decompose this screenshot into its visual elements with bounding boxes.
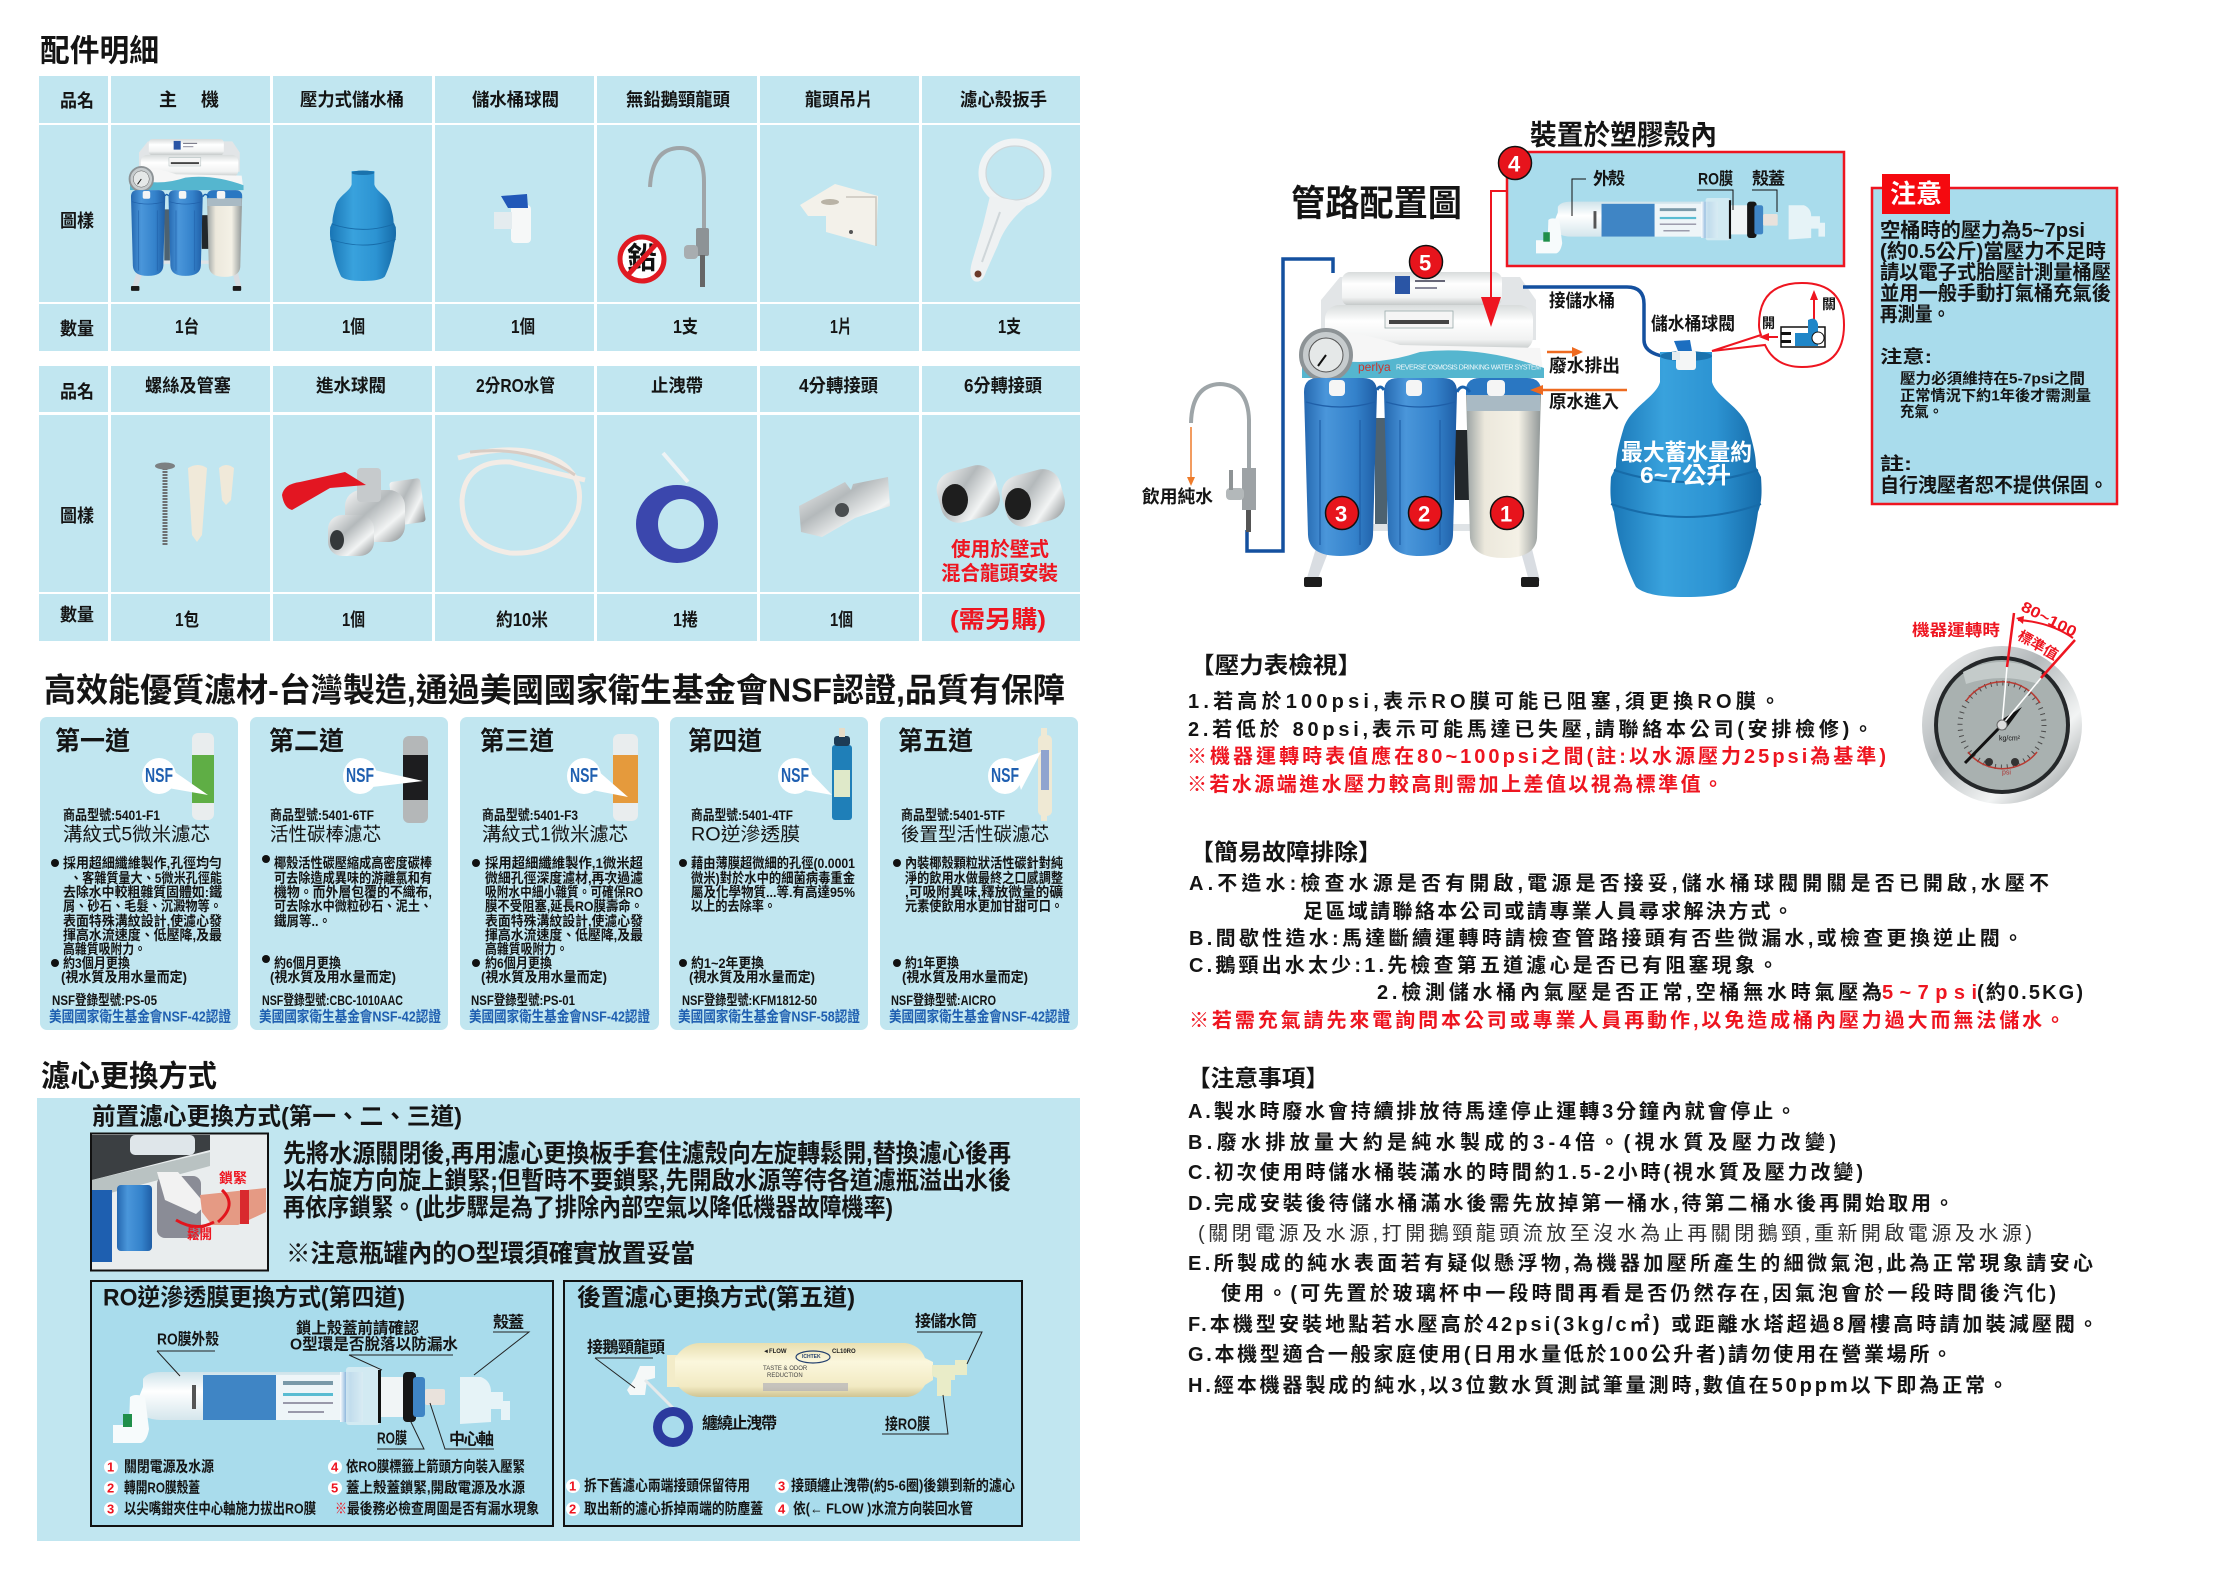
panel: filter stage 5: (視水質及用水量而定) bbox=[902, 969, 1028, 985]
heading: filter quality: 高效能優質濾材-台灣製造,通過美國國家衛生基金會NSF認證,品質有保障 bbox=[44, 672, 1065, 708]
steps: RO membrane: 依RO膜標籤上箭頭方向裝入壓緊 bbox=[346, 1458, 525, 1476]
labels: RO membrane parts: O型環是否脫落以防漏水 bbox=[290, 1334, 458, 1354]
text: precautions: 【注意事項】 bbox=[1187, 1065, 1329, 1091]
panel: filter stage 1: 、客雜質量大、5微米孔徑能 bbox=[70, 870, 222, 886]
panel: filter stage 5: 淨的飲用水做最終之口感調整 bbox=[905, 870, 1063, 886]
panel: filter stage 1: 屑、砂石、毛髮、沉澱物等。 bbox=[63, 898, 222, 914]
steps: post filter: 拆下舊濾心兩端接頭保留待用 bbox=[584, 1476, 750, 1494]
text: pressure range: 正常情況下約1年後才需測量 bbox=[1900, 386, 2091, 404]
table: parts row 2: 混合龍頭安裝 bbox=[941, 561, 1058, 585]
text: pre-filter instructions: 先將水源關閉後,再用濾心更換板手套住濾殼向左旋轉鬆開,替換濾心後再 bbox=[283, 1140, 1011, 1168]
table: parts row 1: 1個 bbox=[511, 317, 535, 337]
labels: post filter parts: 接儲水筒 bbox=[915, 1312, 977, 1330]
photo: inlet ball valve bbox=[282, 468, 426, 556]
text: pressure gauge check bbox=[1187, 652, 1886, 796]
panel: filter stage 4: 美國國家衛生基金會NSF-58認證 bbox=[678, 1008, 860, 1026]
text: simple troubleshooting: 5~7psi bbox=[1882, 982, 1977, 1004]
panel: stage 4 inset: 殼蓋 bbox=[1752, 168, 1785, 188]
panel: filter stage 1 bbox=[40, 717, 238, 1030]
text: pressure gauge check: ※若水源端進水壓力較高則需加上差值以視為標準值。 bbox=[1187, 772, 1723, 796]
steps: RO membrane: 蓋上殼蓋鎖緊,開啟電源及水源 bbox=[346, 1478, 525, 1496]
panel: filter stage 5: ,可吸附異味,釋放微量的礦 bbox=[905, 884, 1063, 900]
table: parts row 2: 止洩帶 bbox=[651, 376, 703, 396]
heading: parts list: 配件明細 bbox=[40, 34, 159, 68]
panel: filter stage 3: 高雜質吸附力。 bbox=[485, 941, 568, 957]
text: simple troubleshooting: ※若需充氣請先來電詢問本公司或專業人員再動作,以免造成桶內壓力過大而無法儲水。 bbox=[1189, 1008, 2065, 1032]
steps: post filter: 取出新的濾心拆掉兩端的防塵蓋 bbox=[584, 1500, 763, 1518]
panel: filter stage 2: 可去除水中微粒砂石、泥土、 bbox=[274, 898, 432, 914]
labels: post filter parts bbox=[587, 1312, 982, 1434]
labels: post filter parts: 接RO膜 bbox=[885, 1414, 930, 1434]
labels: RO membrane parts: RO膜 bbox=[377, 1430, 407, 1448]
steps: post filter: 4 bbox=[778, 1502, 786, 1516]
text: pre-filter instructions bbox=[283, 1140, 1011, 1222]
badge: stage 2 bbox=[1408, 496, 1442, 530]
text: pressure gauge check: ※機器運轉時表值應在80~100psi之間(註:以水源壓力25psi為基準) bbox=[1187, 744, 1886, 768]
photo: pressure tank: 最大蓄水量約 bbox=[1621, 439, 1752, 465]
panel: filter stage 4: 屬及化學物質...等.有高達95% bbox=[691, 884, 855, 900]
badge: stage 5: 5 bbox=[1419, 250, 1431, 276]
icon: NSF bubble bbox=[142, 758, 208, 795]
panel: filter stage 3: 微細孔徑深度濾材,再次過濾 bbox=[485, 870, 643, 886]
panel: stage 4 inset: RO膜 bbox=[1698, 170, 1733, 188]
text: simple troubleshooting: 2.檢測儲水桶內氣壓是否正常,空桶無水時氣壓為 bbox=[1377, 980, 1882, 1004]
table: parts row 2: 數量 bbox=[60, 605, 94, 625]
panel: filter stage 2 bbox=[250, 717, 448, 1030]
steps: post filter: 1 bbox=[569, 1478, 576, 1494]
label: tank valve: 儲水桶球閥 bbox=[1651, 314, 1735, 334]
text: simple troubleshooting: C.鵝頸出水太少:1.先檢查第五道濾心是否已有阻塞現象。 bbox=[1189, 953, 1778, 977]
steps: post filter: 接頭纏止洩帶(約5-6圈)後鎖到新的濾心 bbox=[791, 1476, 1015, 1494]
labels: post filter parts: 纏繞止洩帶 bbox=[702, 1414, 777, 1432]
icon: NSF bubble: NSF bbox=[991, 765, 1019, 787]
panel: filter stage 1: 第一道 bbox=[55, 726, 130, 756]
text: precautions: 使用。(可先置於玻璃杯中一段時間再看是否仍然存在,因氣泡會於一段時間後汽化) bbox=[1221, 1281, 2056, 1305]
steps: RO membrane bbox=[104, 1458, 539, 1518]
heading: filter replacement: 濾心更換方式 bbox=[41, 1060, 217, 1094]
panel: filter stage 4: 微米)對於水中的細菌病毒重金 bbox=[691, 870, 855, 886]
panel: filter stage 2: 商品型號:5401-6TF bbox=[270, 807, 374, 823]
panel: filter stage 2: 椰殼活性碳壓縮成高密度碳棒 bbox=[274, 855, 432, 871]
table: parts row 2: 1捲 bbox=[673, 610, 698, 630]
panel: filter stage 1: 揮高水流速度、低壓降,及最 bbox=[63, 927, 222, 943]
icon: sealing tape ring bbox=[653, 1407, 693, 1447]
table: parts row 2: 約10米 bbox=[496, 610, 548, 630]
text: warranty note: 註: bbox=[1880, 454, 1912, 474]
table: parts row 1: 無鉛鵝頸龍頭 bbox=[626, 89, 730, 110]
icon: NSF bubble bbox=[343, 758, 423, 794]
icon: carbon block cartridge bbox=[403, 736, 428, 823]
panel: filter stage 2: 可去除造成異味的游離氯和有 bbox=[274, 870, 432, 886]
panel: filter stage 5: 後置型活性碳濾芯 bbox=[901, 824, 1049, 846]
text: O-ring note: ※注意瓶罐內的O型環須確實放置妥當 bbox=[286, 1239, 695, 1268]
panel: filter stage 1: 約3個月更換 bbox=[63, 955, 130, 971]
photo: wrench on filter housing bbox=[91, 1134, 268, 1270]
table: parts row 2 bbox=[39, 366, 1080, 641]
steps: post filter: 依(← FLOW )水流方向裝回水管 bbox=[793, 1500, 973, 1518]
panel: filter stage 1: 溝紋式5微米濾芯 bbox=[63, 824, 210, 846]
photo: pressure tank bbox=[1610, 340, 1762, 597]
panel: stage 4 inset bbox=[1507, 152, 1844, 266]
text: precautions: D.完成安裝後待儲水桶滿水後需先放掉第一桶水,待第二桶水後再開始取用。 bbox=[1188, 1191, 1954, 1215]
text: warranty note: 自行洩壓者恕不提供保固。 bbox=[1880, 474, 2108, 497]
badge: stage 4 bbox=[1498, 146, 1532, 180]
icon: NSF bubble: NSF bbox=[346, 765, 374, 787]
diagram: post carbon filter: ◄FLOW bbox=[763, 1349, 787, 1355]
icon: lead-free stamp: 鉛 bbox=[627, 242, 657, 276]
annotation: running standard value: 機器運轉時 bbox=[1912, 620, 2000, 640]
steps: post filter bbox=[566, 1476, 1015, 1518]
table: parts row 1: 1個 bbox=[342, 317, 365, 337]
panel: filter stage 5: 約1年更換 bbox=[905, 955, 959, 971]
photo: wrench on filter housing: 鎖緊 bbox=[219, 1170, 247, 1186]
table: parts row 2: 1個 bbox=[342, 610, 365, 630]
table: parts row 1 bbox=[39, 76, 1080, 351]
table: parts row 1: 圖樣 bbox=[60, 211, 94, 231]
badge: stage 3 bbox=[1326, 496, 1358, 530]
photo: wrench on filter housing: 鬆開 bbox=[187, 1226, 212, 1242]
steps: RO membrane: 5 bbox=[331, 1480, 338, 1496]
text: warranty note bbox=[1880, 454, 2108, 497]
text: precautions: E.所製成的純水表面若有疑似懸浮物,為機器加壓所產生的細微氣泡,此為正常現象請安心 bbox=[1188, 1251, 2093, 1275]
badge: stage 1: 1 bbox=[1500, 502, 1512, 526]
panel: filter stage 3: 約6個月更換 bbox=[485, 955, 552, 971]
diagram: post carbon filter: TASTE & ODOR bbox=[763, 1366, 808, 1372]
callout: valve position: 關 bbox=[1822, 296, 1836, 312]
icon: NSF bubble bbox=[567, 758, 628, 797]
photo: filter housing wrench bbox=[970, 142, 1048, 282]
text: pressure gauge check: 1.若高於100psi,表示RO膜可能已阻塞,須更換RO膜。 bbox=[1188, 689, 1780, 713]
table: parts row 1: 1支 bbox=[673, 317, 698, 337]
text: pressure range: 充氣。 bbox=[1900, 402, 1943, 420]
table: parts row 1: 濾心殼扳手 bbox=[960, 90, 1047, 110]
labels: RO membrane parts: RO膜外殼 bbox=[157, 1330, 219, 1348]
steps: RO membrane: 4 bbox=[331, 1460, 339, 1474]
icon: NSF bubble: NSF bbox=[781, 765, 809, 787]
pipe: pure water line bbox=[1247, 259, 1333, 551]
steps: RO membrane: 1 bbox=[107, 1460, 114, 1474]
icon: RO membrane bbox=[832, 728, 852, 820]
photo: RO machine bbox=[1301, 272, 1544, 587]
table: parts row 2: 2分RO水管 bbox=[476, 375, 555, 396]
diagram: post carbon filter: REDUCTION bbox=[767, 1373, 803, 1379]
diagram: post carbon filter bbox=[627, 1343, 967, 1447]
text: pressure range: 注意: bbox=[1880, 346, 1932, 367]
text: simple troubleshooting: 【簡易故障排除】 bbox=[1190, 839, 1382, 865]
text: pressure gauge check: 2.若低於 80psi,表示可能馬達已失壓,請聯絡本公司(安排檢修)。 bbox=[1188, 717, 1873, 741]
photo: pressure tank bbox=[330, 171, 396, 281]
panel: filter stage 2: 第二道 bbox=[269, 726, 344, 756]
text: precautions: H.經本機器製成的純水,以3位數水質測試筆量測時,數值在50ppm以下即為正常。 bbox=[1188, 1373, 2008, 1397]
panel: filter stage 4: 約1~2年更換 bbox=[691, 955, 764, 971]
label: raw water with arrow: 原水進入 bbox=[1549, 392, 1619, 412]
text: precautions: B.廢水排放量大約是純水製成的3-4倍。(視水質及壓力改變) bbox=[1188, 1130, 1836, 1154]
text: simple troubleshooting bbox=[1189, 839, 2083, 1032]
photo: RO machine: REVERSE OSMOSIS DRINKING WATER SYSTEM bbox=[1396, 364, 1541, 372]
photo: faucet bracket bbox=[800, 184, 878, 246]
panel: filter stage 3: 表面特殊溝紋設計,使濾心發 bbox=[485, 913, 643, 929]
panel: filter stage 4: RO逆滲透膜 bbox=[691, 824, 800, 846]
heading: piping diagram: 管路配置圖 bbox=[1291, 182, 1462, 224]
panel: stage 4 inset: 外殼 bbox=[1593, 168, 1625, 188]
label: waste water with arrow bbox=[1547, 347, 1620, 376]
table: parts row 2: 6分轉接頭 bbox=[964, 376, 1042, 396]
panel: filter stage 1: (視水質及用水量而定) bbox=[61, 969, 187, 985]
photo: 4-point adapter bbox=[799, 477, 890, 537]
text: empty tank pressure: (約0.5公斤)當壓力不足時 bbox=[1880, 240, 2106, 263]
text: pre-filter instructions: 再依序鎖緊。(此步驟是為了排除內部空氣以降低機器故障機率) bbox=[283, 1193, 893, 1222]
annotation: running standard value: 標準值 bbox=[2015, 627, 2061, 663]
photo: pressure tank: 6~7公升 bbox=[1640, 462, 1731, 488]
annotation: running standard value: 80~100 bbox=[2018, 598, 2079, 641]
text: pre-filter instructions: 以右旋方向旋上鎖緊;但暫時不要鎖緊,先開啟水源等待各道濾瓶溢出水後 bbox=[283, 1166, 1011, 1195]
badge: notice tab: 注意 bbox=[1890, 179, 1942, 209]
panel: filter stage 1: 商品型號:5401-F1 bbox=[63, 807, 160, 823]
steps: RO membrane: 關閉電源及水源 bbox=[124, 1458, 214, 1476]
panel: filter stage 5: NSF登錄型號:AICRO bbox=[891, 992, 996, 1008]
panel: filter stage 5: 內裝椰殼顆粒狀活性碳針對純 bbox=[905, 855, 1063, 871]
text: precautions: A.製水時廢水會持續排放待馬達停止運轉3分鐘內就會停止。 bbox=[1188, 1099, 1796, 1123]
panel: post-filter replacement bbox=[564, 1281, 1022, 1526]
arrow: drinking water bbox=[1187, 427, 1195, 486]
badge: notice tab bbox=[1882, 174, 1950, 214]
panel: filter stage 5: 商品型號:5401-5TF bbox=[901, 807, 1005, 823]
panel: filter stage 3: 美國國家衛生基金會NSF-42認證 bbox=[469, 1008, 650, 1026]
photo: RO machine: perlya bbox=[1358, 360, 1391, 374]
panel: filter stage 1: 美國國家衛生基金會NSF-42認證 bbox=[49, 1008, 231, 1026]
callout: valve position bbox=[1712, 283, 1844, 367]
panel: filter stage 1: 採用超細纖維製作,孔徑均勻 bbox=[63, 855, 222, 871]
table: parts row 1: 儲水桶球閥 bbox=[472, 90, 559, 110]
table: parts row 1: 主 機 bbox=[159, 90, 219, 110]
steps: post filter: 3 bbox=[778, 1478, 785, 1494]
photo: 6-point adapters bbox=[933, 461, 1069, 531]
annotation: running standard value bbox=[1912, 598, 2079, 678]
photo: PTFE sealing tape bbox=[636, 453, 718, 563]
badge: stage 1 bbox=[1490, 496, 1524, 530]
icon: NSF bubble: NSF bbox=[570, 765, 598, 787]
panel: filter stage 2: NSF登錄型號:CBC-1010AAC bbox=[262, 992, 403, 1008]
panel: filter stage 3: NSF登錄型號:PS-01 bbox=[471, 992, 575, 1008]
diagram: piping bbox=[1142, 146, 1844, 597]
text: precautions: F.本機型安裝地點若水壓高於42psi(3kg/c㎡) 或距離水塔超過8層樓高時請加裝減壓閥。 bbox=[1188, 1312, 2098, 1336]
table: parts row 1: 壓力式儲水桶 bbox=[300, 90, 404, 110]
panel: filter stage 1: NSF登錄型號:PS-05 bbox=[52, 992, 157, 1008]
labels: RO membrane parts: 中心軸 bbox=[449, 1430, 494, 1448]
panel: filter stage 2: 活性碳棒濾芯 bbox=[270, 824, 381, 846]
diagram: post carbon filter: CL10RO bbox=[832, 1349, 856, 1355]
text: empty tank pressure: 請以電子式胎壓計測量桶壓 bbox=[1880, 260, 2111, 284]
labels: post filter parts: 接鵝頸龍頭 bbox=[587, 1338, 665, 1356]
badge: stage 3: 3 bbox=[1335, 502, 1347, 526]
text: precautions bbox=[1187, 1065, 2098, 1397]
panel: filter stage 3: 溝紋式1微米濾芯 bbox=[482, 824, 628, 846]
badge: stage 4: 4 bbox=[1508, 152, 1521, 176]
table: parts row 1: 1片 bbox=[830, 317, 852, 337]
icon: NSF bubble bbox=[988, 752, 1041, 794]
label: waste water with arrow: 廢水排出 bbox=[1549, 355, 1620, 376]
icon: post carbon filter bbox=[1038, 728, 1052, 821]
panel: filter stage 4: (視水質及用水量而定) bbox=[689, 969, 815, 985]
text: empty tank pressure: 再測量。 bbox=[1880, 303, 1950, 326]
chart: pressure gauge: kg/cm² bbox=[1999, 736, 2021, 742]
panel: filter stage 2: 鐵屑等..。 bbox=[274, 913, 331, 929]
labels: RO membrane parts bbox=[157, 1312, 529, 1449]
labels: RO membrane parts: 鎖上殼蓋前請確認 bbox=[296, 1318, 419, 1338]
table: parts row 1: 龍頭吊片 bbox=[805, 89, 873, 110]
panel: filter stage 4: NSF登錄型號:KFM1812-50 bbox=[682, 992, 817, 1008]
panel: filter stage 4 bbox=[670, 717, 868, 1030]
text: empty tank pressure: 並用一般手動打氣桶充氣後 bbox=[1880, 282, 2111, 305]
text: pressure range bbox=[1880, 346, 2091, 420]
chart: pressure gauge: psi bbox=[2002, 770, 2011, 776]
panel: filter stage 5: 美國國家衛生基金會NSF-42認證 bbox=[889, 1008, 1070, 1026]
label: drinking water: 飲用純水 bbox=[1142, 486, 1213, 507]
panel: filter stage 5: 元素使飲用水更加甘甜可口。 bbox=[905, 898, 1063, 914]
table: parts row 2: 品名 bbox=[60, 382, 94, 402]
panel: RO membrane replacement: RO逆滲透膜更換方式(第四道) bbox=[103, 1284, 405, 1312]
photo: RO water tube coil bbox=[458, 450, 585, 553]
text: simple troubleshooting: B.間歇性造水:馬達斷續運轉時請檢查管路接頭有否些微漏水,或檢查更換逆止閥。 bbox=[1189, 926, 2023, 950]
text: empty tank pressure bbox=[1880, 218, 2111, 326]
table: parts row 2: 1個 bbox=[830, 610, 853, 630]
steps: RO membrane: 轉開RO膜殼蓋 bbox=[124, 1478, 200, 1496]
panel: RO membrane replacement bbox=[91, 1281, 553, 1526]
text: precautions: G.本機型適合一般家庭使用(日用水量低於100公升者)請勿使用在營業場所。 bbox=[1188, 1342, 1952, 1366]
icon: sediment filter cartridge bbox=[192, 733, 214, 820]
panel: post-filter replacement: 後置濾心更換方式(第五道) bbox=[577, 1284, 855, 1312]
panel: filter stage 3: 第三道 bbox=[480, 726, 554, 756]
callout: valve position: 開 bbox=[1762, 315, 1775, 331]
steps: RO membrane: 最後務必檢查周圍是否有漏水現象 bbox=[347, 1500, 539, 1518]
badge: stage 5 bbox=[1410, 246, 1442, 278]
chart: pressure gauge bbox=[1912, 598, 2082, 804]
table: parts row 2: 圖樣 bbox=[60, 506, 94, 526]
panel: filter stage 2: (視水質及用水量而定) bbox=[270, 969, 396, 985]
panel: filter stage 4: 商品型號:5401-4TF bbox=[691, 807, 793, 823]
panel: filter stage 1: 表面特殊溝紋設計,使濾心發 bbox=[63, 913, 222, 929]
icon: 1 micron cartridge bbox=[613, 734, 638, 821]
text: empty tank pressure: 空桶時的壓力為5~7psi bbox=[1880, 218, 2085, 242]
panel: filter stage 4: 第四道 bbox=[688, 726, 762, 756]
steps: post filter: 2 bbox=[569, 1502, 576, 1516]
panel: filter stage 2: 約6個月更換 bbox=[274, 955, 341, 971]
table: parts row 2: 使用於壁式 bbox=[951, 537, 1049, 561]
text: precautions: C.初次使用時儲水桶裝滿水的時間約1.5-2小時(視水質及壓力改變) bbox=[1188, 1160, 1863, 1184]
panel: filter stage 3: (視水質及用水量而定) bbox=[481, 969, 607, 985]
panel: filter stage 1: 高雜質吸附力。 bbox=[63, 941, 146, 957]
text: pressure range: 壓力必須維持在5-7psi之間 bbox=[1900, 370, 2085, 388]
label: to tank: 接儲水桶 bbox=[1549, 291, 1615, 311]
photo: screw and wall plugs bbox=[155, 462, 234, 546]
table: parts row 2: 螺絲及管塞 bbox=[145, 375, 231, 396]
panel: filter stage 3: 吸附水中細小雜質。可確保RO bbox=[485, 884, 643, 900]
steps: RO membrane: 3 bbox=[107, 1502, 114, 1516]
table: parts row 1: 1支 bbox=[998, 317, 1021, 337]
text: simple troubleshooting: (約0.5KG) bbox=[1977, 981, 2083, 1004]
table: parts row 2: (需另購) bbox=[950, 606, 1046, 634]
photo: faucet bbox=[1191, 384, 1256, 532]
panel: filter stage 3: 商品型號:5401-F3 bbox=[482, 807, 578, 823]
heading: pre-filter replacement: 前置濾心更換方式(第一、二、三道) bbox=[92, 1102, 462, 1130]
panel: filter stage 3: 膜不受阻塞,延長RO膜壽命。 bbox=[485, 898, 643, 914]
panel: filter stage 2: 機物。而外層包覆的不織布, bbox=[274, 884, 432, 900]
panel: filter stage 5 bbox=[880, 717, 1078, 1030]
table: parts row 2: 4分轉接頭 bbox=[799, 376, 878, 396]
icon: NSF bubble: NSF bbox=[145, 765, 173, 787]
panel: filter stage 5: 第五道 bbox=[898, 726, 973, 756]
text: pressure gauge check: 【壓力表檢視】 bbox=[1190, 652, 1362, 678]
table: parts row 1: 品名 bbox=[60, 91, 94, 111]
text: precautions: (關閉電源及水源,打開鵝頸龍頭流放至沒水為止再關閉鵝頸,重新開啟電源及水源) bbox=[1198, 1222, 2032, 1245]
icon: NSF bubble bbox=[778, 758, 832, 795]
steps: RO membrane: ※ bbox=[335, 1500, 347, 1518]
text: simple troubleshooting: A.不造水:檢查水源是否有開啟,電源是否接妥,儲水桶球閥開關是否已開啟,水壓不 bbox=[1189, 871, 2049, 895]
label: raw water with arrow bbox=[1530, 385, 1627, 412]
panel: filter stage 1: 去除水中較粗雜質固體如:鐵 bbox=[63, 884, 222, 900]
steps: RO membrane: 以尖嘴鉗夾住中心軸施力拔出RO膜 bbox=[124, 1500, 316, 1518]
heading: inside plastic housing: 裝置於塑膠殼內 bbox=[1530, 120, 1717, 150]
arrow: red pointer to stage 4 bbox=[1481, 191, 1507, 327]
labels: RO membrane parts: 殼蓋 bbox=[493, 1312, 524, 1332]
badge: stage 2: 2 bbox=[1418, 502, 1430, 526]
table: parts row 2: 1包 bbox=[175, 610, 199, 630]
diagram: RO membrane housing bbox=[113, 1367, 510, 1443]
photo: main unit bbox=[130, 139, 244, 291]
table: parts row 1: 數量 bbox=[60, 319, 94, 339]
diagram: post carbon filter: ICHTEK bbox=[802, 1354, 821, 1360]
panel: filter stage 3: 揮高水流速度、低壓降,及最 bbox=[485, 927, 643, 943]
panel: filter stage 3 bbox=[460, 717, 659, 1030]
table: parts row 1: 1台 bbox=[175, 316, 199, 337]
pipe: to tank bbox=[1523, 287, 1662, 356]
panel: filter stage 3: 採用超細纖維製作,1微米超 bbox=[485, 855, 643, 871]
photo: gooseneck faucet with lead-free stamp bbox=[620, 148, 709, 287]
panel: filter stage 2: 美國國家衛生基金會NSF-42認證 bbox=[259, 1008, 441, 1026]
steps: RO membrane: 2 bbox=[107, 1480, 114, 1496]
panel: filter stage 4: 藉由薄膜超微細的孔徑(0.0001 bbox=[691, 855, 855, 871]
photo: tank ball valve bbox=[494, 194, 531, 243]
text: simple troubleshooting: 足區域請聯絡本公司或請專業人員尋求解決方式。 bbox=[1303, 899, 1793, 923]
panel: notice bbox=[1872, 174, 2117, 504]
panel: filter stage 4: 以上的去除率。 bbox=[691, 898, 776, 914]
panel: filter replacement bbox=[37, 1098, 1080, 1541]
table: parts row 2: 進水球閥 bbox=[316, 376, 386, 396]
